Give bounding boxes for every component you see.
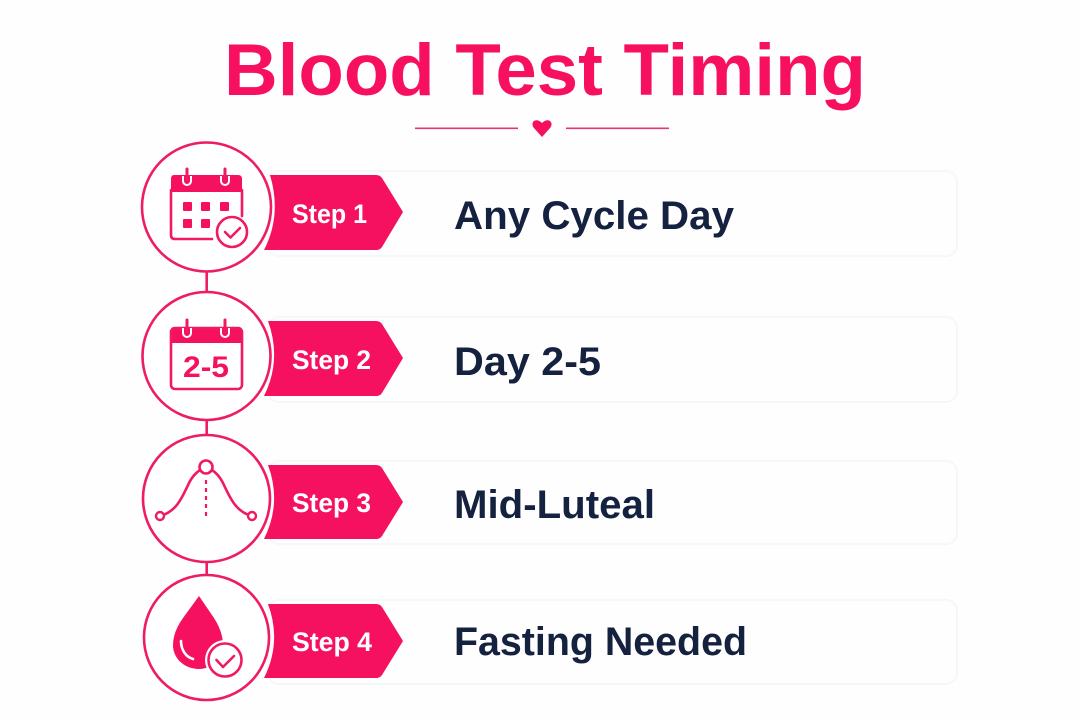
card: step 1 [268, 171, 957, 256]
label: step 2: Step 2 [292, 345, 371, 375]
circle: step 4 [144, 575, 269, 700]
icon: mid-luteal curve [156, 460, 256, 520]
label: step 4: Step 4 [292, 627, 372, 657]
title divider with heart [415, 120, 669, 137]
text: fasting needed: Fasting Needed [454, 620, 747, 664]
step 1 row [142, 142, 957, 272]
icon: calendar 2-5: 2-5 [183, 351, 229, 384]
icon: blood drop with check [173, 596, 245, 680]
step 4 row [144, 575, 957, 700]
label: step 3: Step 3 [292, 488, 371, 518]
text: any cycle day: Any Cycle Day [454, 194, 735, 238]
circle: step 2 [142, 292, 270, 420]
badge: step 2 [264, 321, 403, 396]
title: Blood Test Timing [224, 30, 866, 111]
label: step 1: Step 1 [292, 199, 367, 229]
badge: step 3 [264, 465, 403, 539]
badge: step 1 [264, 175, 403, 250]
card: step 3 [268, 461, 957, 544]
text: mid-luteal: Mid-Luteal [454, 483, 655, 527]
connector lines [205, 271, 208, 575]
icon: calendar with check [171, 169, 247, 247]
card: step 4 [268, 600, 957, 684]
step 2 row [142, 292, 957, 420]
badge: step 4 [264, 604, 403, 678]
circle: step 3 [143, 435, 270, 562]
card: step 2 [268, 317, 957, 402]
text: day 2-5: Day 2-5 [454, 340, 601, 384]
icon: calendar 2-5 [171, 320, 242, 389]
circle: step 1 [142, 142, 271, 272]
step 3 row [143, 435, 957, 562]
